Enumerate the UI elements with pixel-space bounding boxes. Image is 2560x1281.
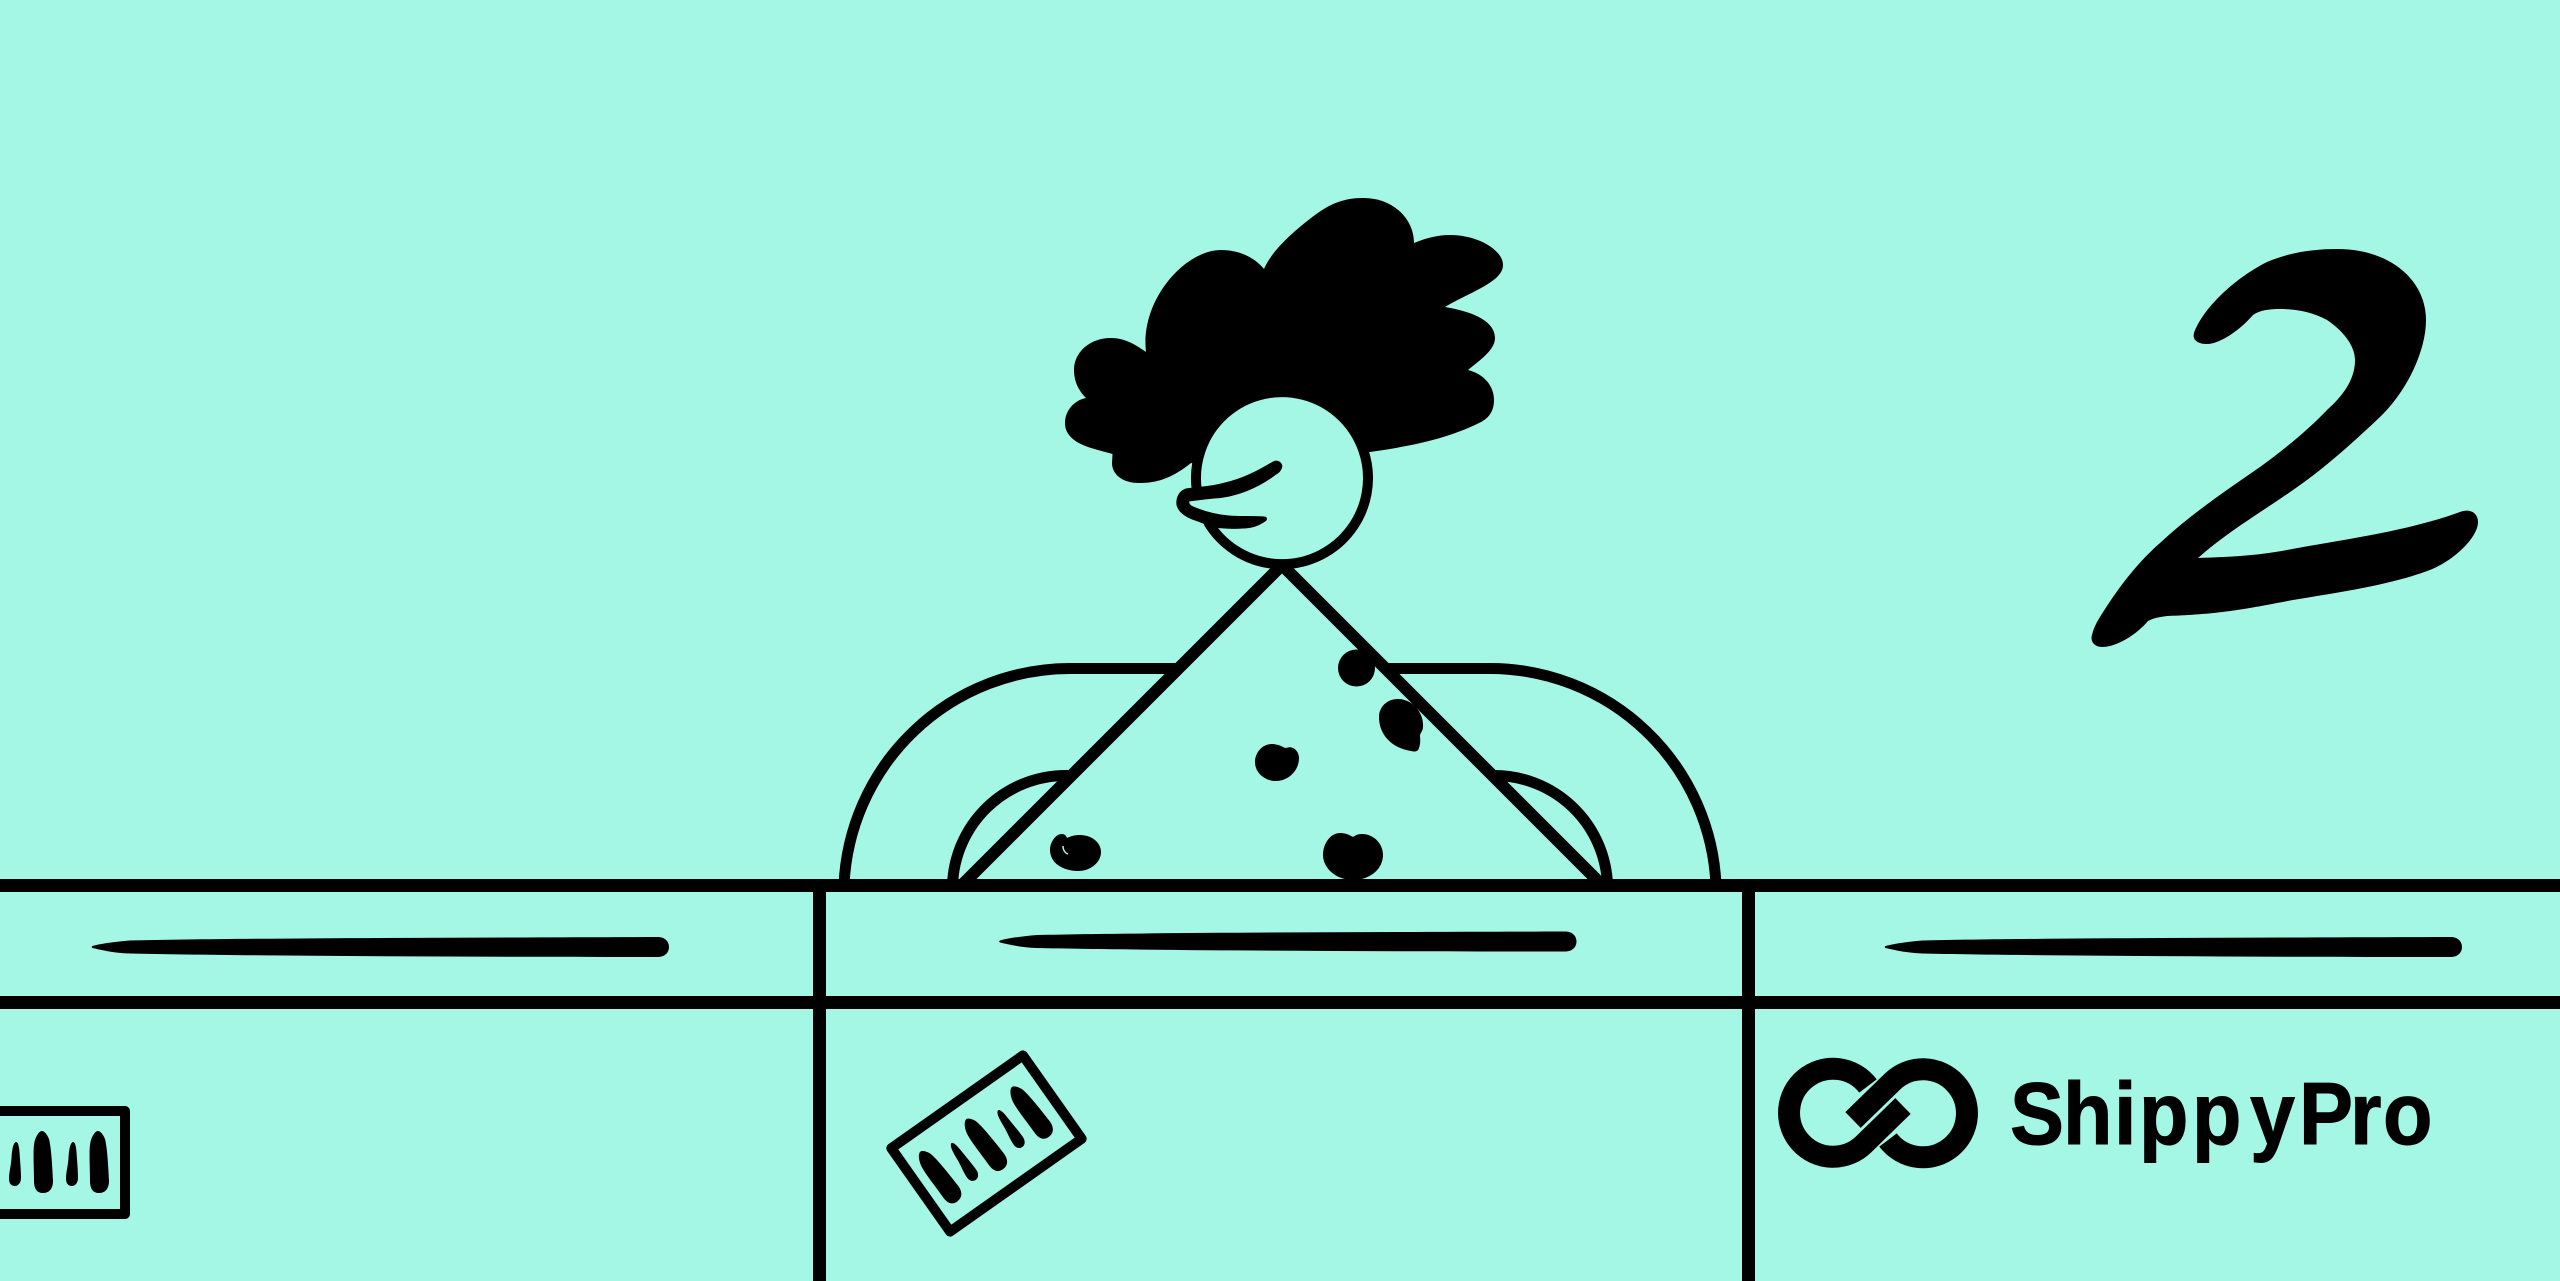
body spots (1050, 650, 1423, 880)
wordmark: ShippyPro (2010, 1064, 2432, 1163)
arms (844, 668, 1716, 885)
ticket: centre cell (891, 1055, 1082, 1232)
numeral 2 (2091, 249, 2478, 647)
ticket: left cell (0, 1111, 125, 1214)
table grid (0, 879, 2560, 1281)
body triangle (962, 565, 1602, 885)
logo mark (1789, 1069, 1967, 1157)
pen stroke: centre cell (999, 932, 1576, 952)
pen stroke: right cell (1885, 937, 2462, 957)
logo: ShippyPro (1789, 1064, 2432, 1163)
head (1196, 392, 1368, 564)
figure: person (844, 198, 1716, 885)
hand on chin (1177, 461, 1282, 528)
hair (1065, 198, 1503, 483)
pen stroke: left cell (92, 937, 669, 957)
